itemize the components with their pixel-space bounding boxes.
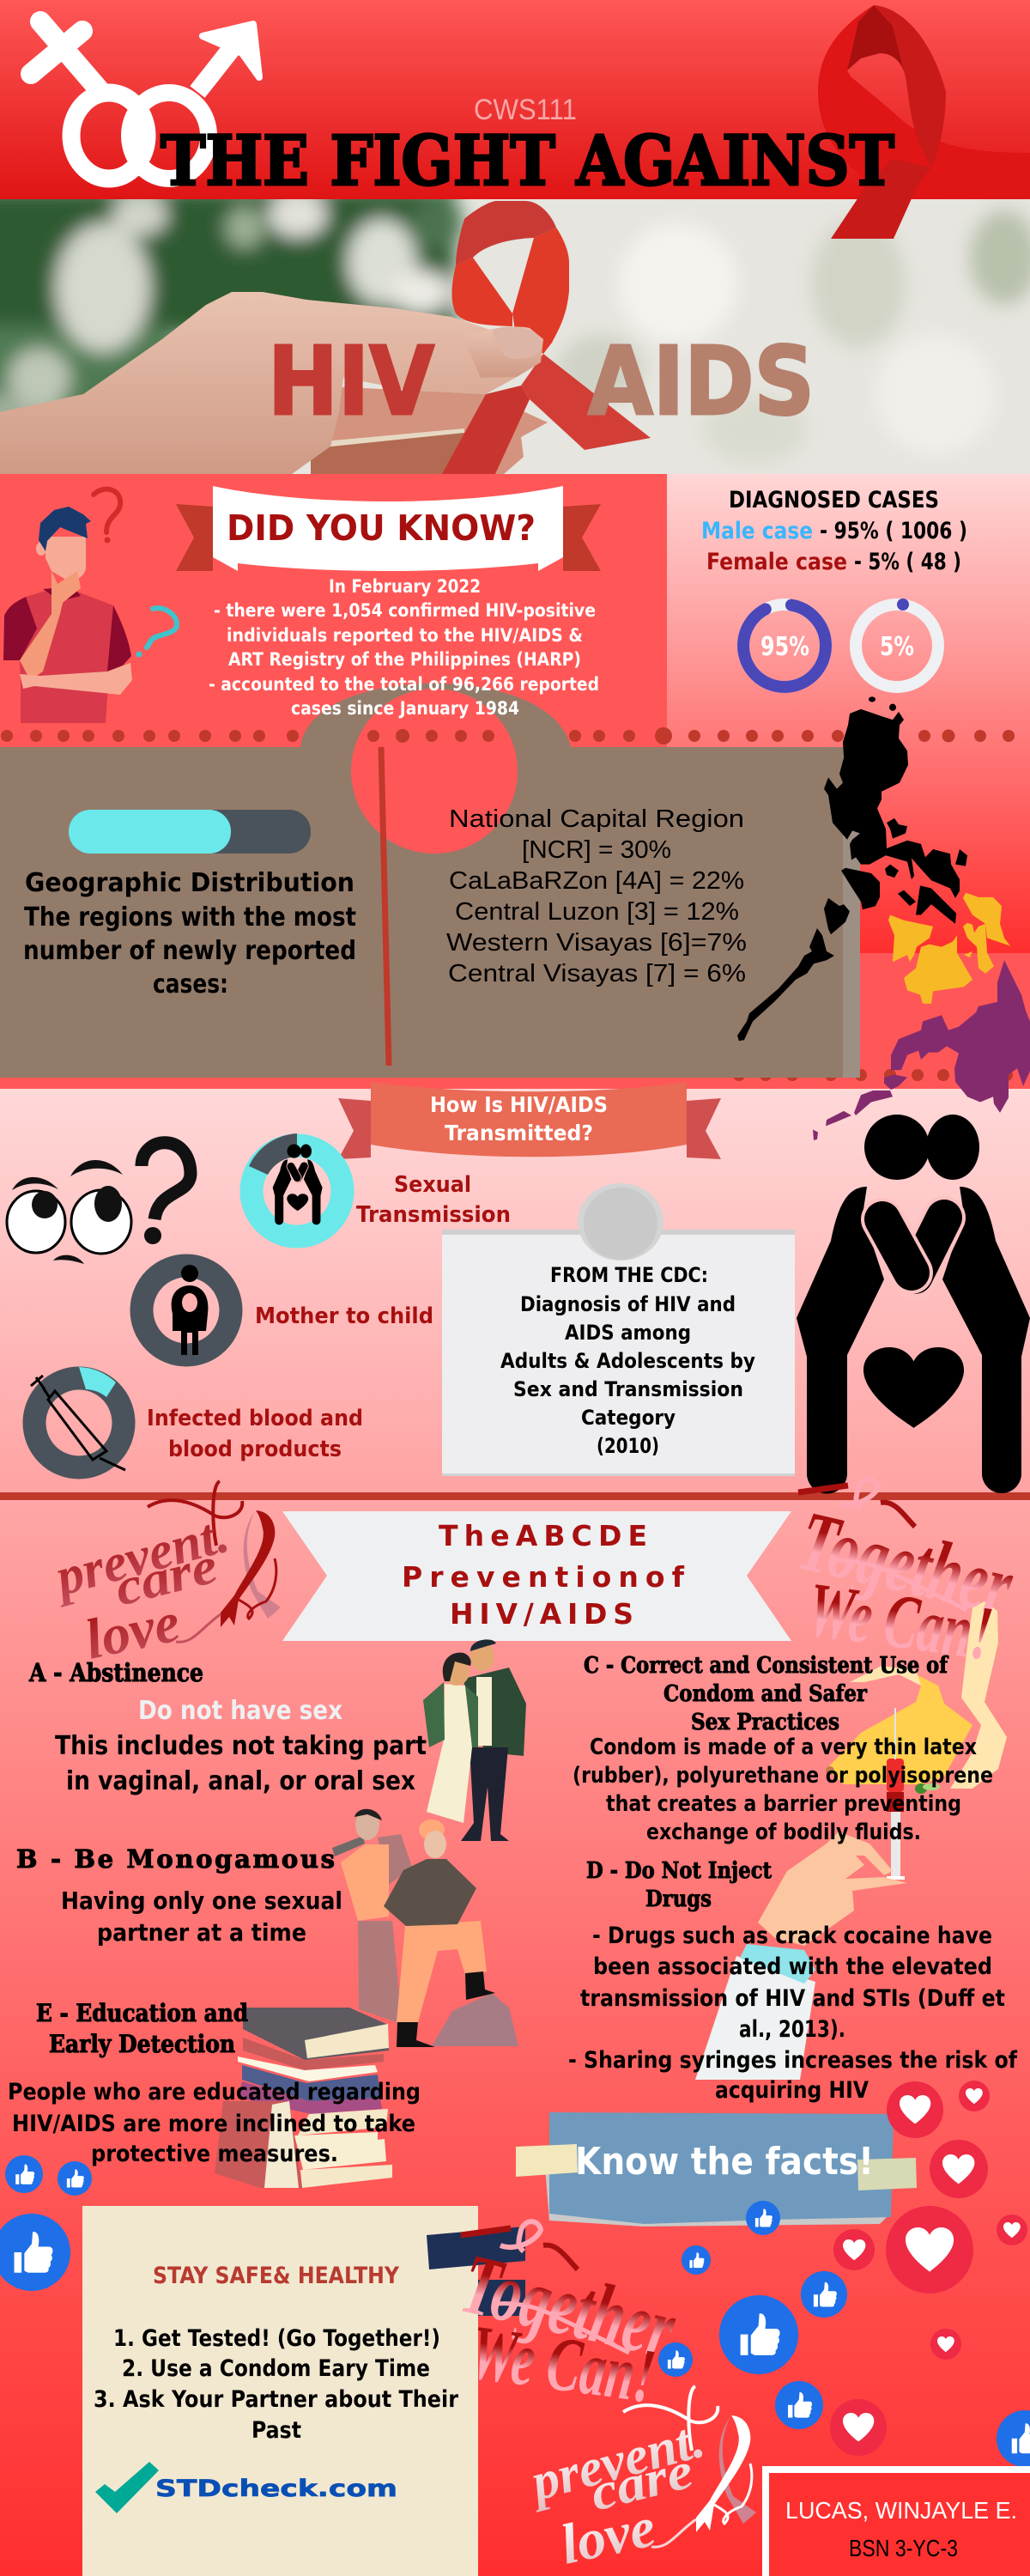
panel: right lower red band <box>667 953 1030 1091</box>
lettering: prevent care love white: prevent. <box>521 2410 711 2513</box>
card: CDC note: Category <box>581 1406 676 1430</box>
text block: E education: protective measures. <box>91 2141 338 2167</box>
chart: 5 percent donut: 5% <box>880 632 914 662</box>
text block: C condom: that creates a barrier preventing <box>606 1791 961 1817</box>
chart: 95 percent donut <box>743 605 826 687</box>
lettering: prevent care love white: love <box>555 2495 661 2576</box>
icon: banana and peel <box>826 1601 1007 1794</box>
card: CDC note: Diagnosis of HIV and <box>520 1292 736 1316</box>
icon: red awareness ribbon top right <box>818 5 1030 239</box>
panel: stay safe card <box>82 2206 478 2576</box>
panel: hero photo with hand and ribbon <box>0 189 1030 474</box>
label: mother to child: Mother to child <box>255 1303 433 1329</box>
note: know the facts paper <box>516 2112 917 2227</box>
panel: did you know background <box>0 474 667 757</box>
banner: ABCDE prevention <box>282 1511 791 1641</box>
banner: did you know ribbon <box>176 486 601 571</box>
text block: region percentages: Western Visayas [6]=7% <box>446 929 747 957</box>
illustration: hikers <box>332 1809 518 2047</box>
text block: geographic distribution: number of newly reported <box>23 936 356 966</box>
text block: C condom: exchange of bodily fluids. <box>646 1820 921 1845</box>
label: sexual transmission <box>356 1172 511 1228</box>
text block: did you know paragraph: - accounted to the total of 96,266 reported <box>209 674 599 695</box>
lettering: prevent care love red: prevent. <box>45 1505 235 1608</box>
chart: 95 percent donut: 95% <box>760 632 809 662</box>
label: sexual transmission: Sexual <box>394 1172 471 1198</box>
label: infected blood <box>147 1406 363 1462</box>
panel: geographic distribution card <box>0 683 860 1078</box>
text block: did you know paragraph: individuals reported to the HIV/AIDS & <box>227 625 583 646</box>
text block: D drugs: Drugs <box>645 1886 712 1912</box>
text block: geographic distribution: The regions with the most <box>24 902 356 933</box>
label: sexual transmission: Transmission <box>356 1202 511 1228</box>
divider: red bar <box>0 1492 1030 1500</box>
banner: ABCDE prevention: TheABCDE <box>439 1519 647 1552</box>
illustration: stack of books <box>215 2008 392 2188</box>
heading: did you know: DID YOU KNOW? <box>227 507 536 549</box>
label: infected blood: blood products <box>168 1437 342 1462</box>
note: know the facts paper: Know the facts! <box>575 2140 874 2184</box>
panel: left lower red band <box>0 747 667 1091</box>
text block: B be monogamous: B - Be Monogamous <box>16 1844 335 1874</box>
text block: C condom <box>573 1653 993 1845</box>
map: Mindanao in purple <box>813 960 1030 1140</box>
banner: ABCDE prevention: Preventionof <box>402 1560 685 1594</box>
lettering: prevent care love red <box>45 1481 281 1672</box>
text block: region percentages: Central Luzon [3] = 12% <box>455 898 739 926</box>
text block: did you know paragraph: - there were 1,054 confirmed HIV-positive <box>214 600 596 621</box>
card: CDC note: Adults & Adolescents by <box>500 1349 755 1373</box>
text block: did you know paragraph <box>209 576 599 719</box>
banner: how is HIV transmitted: How Is HIV/AIDS <box>430 1092 608 1117</box>
icon: mother to child <box>142 1265 231 1355</box>
text block: A abstinence: in vaginal, anal, or oral sex <box>66 1766 415 1796</box>
text block: E education: People who are educated regarding <box>8 2079 421 2105</box>
text block: C condom: Condom and Safer <box>663 1681 867 1707</box>
panel: header band <box>0 0 1030 199</box>
card: CDC note <box>442 1183 795 1476</box>
heading: HIV: HIV <box>268 326 434 436</box>
text block: diagnosed cases: - 5% ( 48 ) <box>854 549 961 575</box>
icon: syringe <box>31 1367 125 1470</box>
text block: region percentages: Central Visayas [7] = 6% <box>448 960 746 987</box>
icon: white gender symbols <box>31 21 259 179</box>
text block: diagnosed cases: - 95% ( 1006 ) <box>820 518 967 544</box>
card: CDC note: FROM THE CDC: <box>550 1263 708 1287</box>
heading: AIDS: AIDS <box>588 326 815 436</box>
illustration: hand holding syringe <box>695 1708 907 2080</box>
text block: region percentages: [NCR] = 30% <box>522 836 671 864</box>
credit box: author <box>766 2470 1030 2576</box>
text block: A abstinence <box>28 1658 427 1796</box>
logo: STDcheck.com: STDcheck.com <box>155 2476 397 2502</box>
text block: A abstinence: Do not have sex <box>138 1696 342 1726</box>
decorative lower dots row <box>733 1069 1013 1081</box>
icon: progress pill <box>69 810 311 854</box>
text block: A abstinence: This includes not taking part <box>55 1731 427 1761</box>
text block: region percentages: CaLaBaRZon [4A] = 22% <box>449 867 744 895</box>
lettering: prevent care love red: care <box>109 1537 223 1617</box>
credit box: author: BSN 3-YC-3 <box>849 2535 958 2561</box>
text block: geographic distribution <box>23 868 356 999</box>
text block: D drugs: al., 2013). <box>739 2016 845 2043</box>
text block: A abstinence: A - Abstinence <box>28 1658 203 1687</box>
icon: large embracing couple <box>797 1115 1030 1493</box>
card: CDC note: (2010) <box>597 1434 659 1458</box>
label: infected blood: Infected blood and <box>147 1406 363 1431</box>
lettering: together we can lower: We Can! <box>465 2310 660 2420</box>
panel: transmission section background <box>0 1089 1030 1492</box>
panel: diagnosed cases background <box>667 474 1030 953</box>
decorative dots row <box>1 727 1015 744</box>
icons: red heart reactions <box>830 2081 1027 2456</box>
lettering: prevent care love white <box>521 2386 756 2576</box>
chart: 5 percent donut <box>856 598 938 687</box>
decoration: navy paper behind lettering <box>427 2227 525 2316</box>
text block: C condom: Sex Practices <box>691 1710 839 1735</box>
panel: stay safe card: 3. Ask Your Partner about Their <box>94 2386 459 2413</box>
text block: E education: HIV/AIDS are more inclined to take <box>12 2111 415 2137</box>
text block: did you know paragraph: ART Registry of the Philippines (HARP) <box>228 649 581 670</box>
illustration: couple standing <box>423 1639 526 1841</box>
map: Visayas in yellow <box>888 893 1010 1004</box>
icons: blue like reactions <box>0 2155 1030 2467</box>
panel: stay safe card: 1. Get Tested! (Go Together!) <box>113 2325 440 2352</box>
card: CDC note: AIDS among <box>565 1321 691 1345</box>
text block: E education: Early Detection <box>49 2030 235 2058</box>
text block: D drugs: D - Do Not Inject <box>586 1858 772 1884</box>
title: The Fight Against: THE FIGHT AGAINST <box>161 120 894 201</box>
banner: ABCDE prevention: HIV/AIDS <box>450 1597 633 1631</box>
text block: D drugs: acquiring HIV <box>715 2077 869 2104</box>
text block: did you know paragraph: In February 2022 <box>329 576 481 597</box>
card: CDC note: Sex and Transmission <box>513 1377 743 1401</box>
panel: stay safe card: Past <box>251 2417 301 2444</box>
lettering: together we can lower: Together <box>453 2235 684 2377</box>
text block: diagnosed cases: Female case <box>706 549 847 575</box>
text block: diagnosed cases: Male case <box>701 518 813 544</box>
text block: diagnosed cases <box>701 487 967 575</box>
text block: region percentages <box>446 805 747 987</box>
banner: how is HIV transmitted <box>338 1082 721 1159</box>
text block: B be monogamous: partner at a time <box>97 1918 306 1947</box>
icon: thinking man with question marks <box>3 489 177 723</box>
lettering: prevent care love white: care <box>585 2442 699 2522</box>
panel: prevention section background <box>0 1499 1030 2576</box>
text block: D drugs: been associated with the elevated <box>593 1953 992 1980</box>
panel: stay safe card: 2. Use a Condom Eary Time <box>122 2355 430 2382</box>
text block: E education: E - Education and <box>36 1999 248 2027</box>
banner: how is HIV transmitted: Transmitted? <box>445 1121 593 1145</box>
lettering: prevent care love red: love <box>80 1590 185 1672</box>
icon: sexual transmission <box>249 1133 342 1236</box>
text block: geographic distribution: cases: <box>153 969 228 999</box>
map: Philippines <box>737 696 1030 1140</box>
text block: diagnosed cases: DIAGNOSED CASES <box>729 487 939 513</box>
credit box: author: LUCAS, WINJAYLE E. <box>785 2497 1017 2524</box>
text block: E education <box>8 1999 421 2167</box>
subtitle: CWS111: CWS111 <box>474 94 577 126</box>
icon: worried eyes with question mark <box>7 1143 191 1264</box>
map: Luzon and western islands in black <box>737 696 967 1041</box>
icon: teal check <box>95 2462 159 2513</box>
text block: region percentages: National Capital Region <box>449 805 744 833</box>
lettering: together we can lower <box>453 2221 684 2420</box>
text block: C condom: C - Correct and Consistent Use of <box>584 1653 949 1679</box>
text block: B be monogamous <box>16 1844 342 1947</box>
panel: stay safe card: STAY SAFE& HEALTHY <box>153 2263 399 2289</box>
text block: geographic distribution: Geographic Distribution <box>25 868 354 898</box>
text block: D drugs <box>568 1858 1017 2104</box>
text block: B be monogamous: Having only one sexual <box>61 1886 342 1915</box>
text block: did you know paragraph: cases since January 1984 <box>291 698 519 719</box>
